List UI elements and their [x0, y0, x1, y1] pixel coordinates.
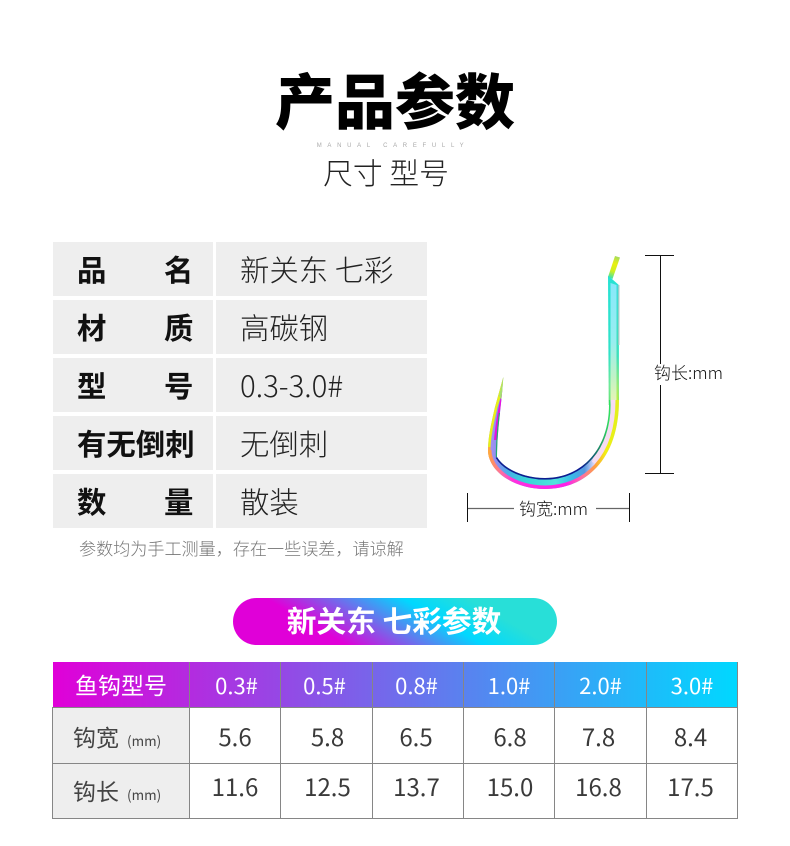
header: 3.0#: 3.0# — [671, 669, 713, 701]
spec value: barb — [216, 416, 427, 470]
note: measurement disclaimer: 参数均为手工测量，存在一些误差，请谅解 — [79, 535, 404, 560]
hook shank — [608, 276, 620, 412]
section heading text: 新关东 七彩参数 — [287, 598, 501, 641]
hook length values: 13.7 — [393, 768, 440, 803]
hook length values — [212, 768, 714, 803]
table header gradient band — [53, 662, 737, 708]
hook length values: 12.5 — [304, 768, 351, 803]
label: hook length: 钩长:mm — [654, 359, 723, 384]
spec value: name — [216, 242, 427, 296]
spec label: name: 名 — [164, 248, 193, 290]
spec value: model — [216, 358, 427, 412]
spec value: material: 高碳钢 — [240, 306, 328, 348]
dimension: hook length — [645, 255, 674, 474]
hook eye — [608, 256, 620, 279]
spec label: model — [53, 358, 213, 412]
header: 1.0#: 1.0# — [488, 669, 530, 701]
icon: rainbow fish hook with dimension lines — [467, 255, 723, 522]
hook width values: 5.6 — [218, 718, 252, 753]
subtitle: size and model: 尺寸 型号 — [323, 149, 449, 193]
header: 2.0#: 2.0# — [579, 669, 622, 701]
spec label: quantity — [53, 474, 213, 528]
spec value: model: 0.3-3.0# — [240, 364, 343, 406]
table row header: hook width: 钩宽 (mm) — [73, 719, 161, 753]
spec label: name: 品 — [77, 248, 106, 290]
hook width values: 7.8 — [582, 718, 615, 753]
hook length values: 15.0 — [487, 768, 533, 803]
header: 0.3#: 0.3# — [215, 669, 258, 701]
spec value: quantity — [216, 474, 427, 528]
table: hook sizes — [52, 662, 738, 819]
header: 0.5#: 0.5# — [303, 669, 346, 701]
hook width values: 6.5 — [399, 718, 433, 753]
spec label: material: 材 — [77, 306, 106, 348]
header: 0.8#: 0.8# — [395, 669, 438, 701]
dimension: hook width — [468, 493, 630, 522]
spec value: quantity: 散装 — [240, 480, 299, 522]
spec label: barb — [53, 416, 213, 470]
hook width values: 6.8 — [493, 718, 527, 753]
spec value: name: 新关东 七彩 — [240, 248, 393, 290]
spec label: model: 型 — [77, 364, 106, 406]
hook bend — [488, 377, 619, 489]
subtitle: manual carefully: MANUAL CAREFULLY — [317, 143, 469, 149]
table row header: hook length: 钩长 (mm) — [73, 773, 161, 807]
header: hook model: 鱼钩型号 — [75, 667, 167, 701]
table row header: hook width — [53, 708, 189, 763]
hook length values: 11.6 — [212, 768, 258, 803]
hook length values: 17.5 — [667, 768, 714, 803]
table grid lines — [52, 662, 738, 819]
spec label: name — [53, 242, 213, 296]
hook width values: 5.8 — [311, 718, 344, 753]
spec value: material — [216, 300, 427, 354]
spec label: material — [53, 300, 213, 354]
spec label: quantity: 量 — [164, 480, 193, 522]
spec label: barb: 有无倒刺 — [77, 422, 195, 464]
panel: specification list — [53, 242, 427, 528]
spec label: material: 质 — [164, 306, 193, 348]
section heading pill — [233, 598, 557, 645]
spec value: barb: 无倒刺 — [240, 422, 328, 464]
table row header: hook length — [53, 763, 189, 818]
hook width values: 8.4 — [674, 718, 707, 753]
label: hook width: 钩宽:mm — [519, 495, 588, 520]
hook width values — [218, 718, 707, 753]
hook length values: 16.8 — [575, 768, 622, 803]
spec label: model: 号 — [164, 364, 193, 406]
spec label: quantity: 数 — [77, 480, 106, 522]
title: 产品参数 — [275, 55, 515, 142]
